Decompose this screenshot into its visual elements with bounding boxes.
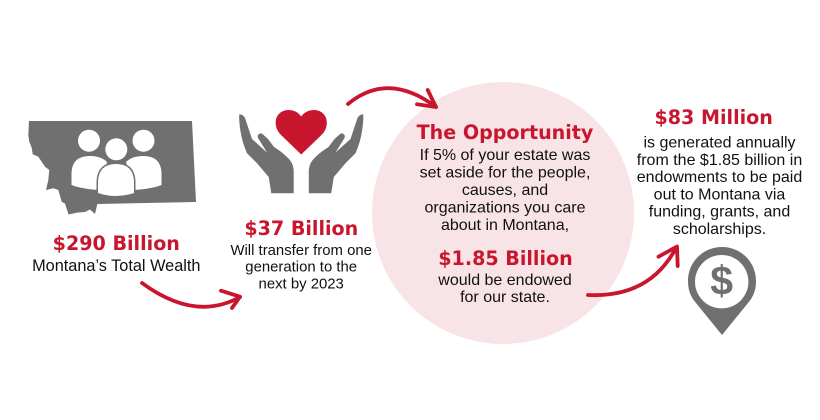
text: annual funding description: out to Montana via [654, 186, 785, 203]
arrow: transfer to opportunity [348, 88, 436, 107]
text: endowed: for our state. [460, 289, 550, 306]
arrow: wealth to transfer [142, 283, 240, 308]
text: annual funding description: endowments to be paid [637, 169, 802, 186]
text: opportunity description: set aside for the people, [420, 164, 590, 182]
icon: Montana map with family [28, 121, 196, 214]
text: annual funding description: scholarships. [673, 221, 766, 238]
icon: hands holding heart [239, 110, 363, 193]
text: opportunity description: causes, and [462, 182, 548, 199]
text: endowed: would be endowed [438, 272, 572, 289]
arrow: opportunity to annual funding [588, 246, 678, 295]
heading: The Opportunity: The Opportunity [417, 121, 594, 144]
text: annual funding description: from the $1.85 billion in [637, 152, 802, 169]
text: opportunity description: If 5% of your estate was [420, 147, 590, 164]
text: transfer description: generation to the [245, 260, 357, 276]
icon: dollar location pin [688, 247, 756, 335]
text: Montana's Total Wealth: Montana’s Total Wealth [32, 257, 200, 275]
text: transfer description: Will transfer from one [230, 243, 372, 259]
text: annual funding description: funding, grants, and [649, 204, 790, 221]
text: transfer description: next by 2023 [259, 276, 344, 292]
panel: opportunity circle [372, 82, 634, 344]
text: opportunity description: about in Montana, [441, 217, 569, 234]
heading: $290 Billion: $290 Billion [53, 232, 180, 255]
text: opportunity description: organizations you care [425, 200, 586, 216]
heading: $83 Million: $83 Million [654, 106, 773, 129]
heading: $37 Billion: $37 Billion [244, 217, 358, 240]
icon: dollar location pin: $ [710, 258, 733, 304]
heading: $1.85 Billion: $1.85 Billion [438, 247, 573, 270]
text: annual funding description: is generated annually [643, 134, 796, 152]
